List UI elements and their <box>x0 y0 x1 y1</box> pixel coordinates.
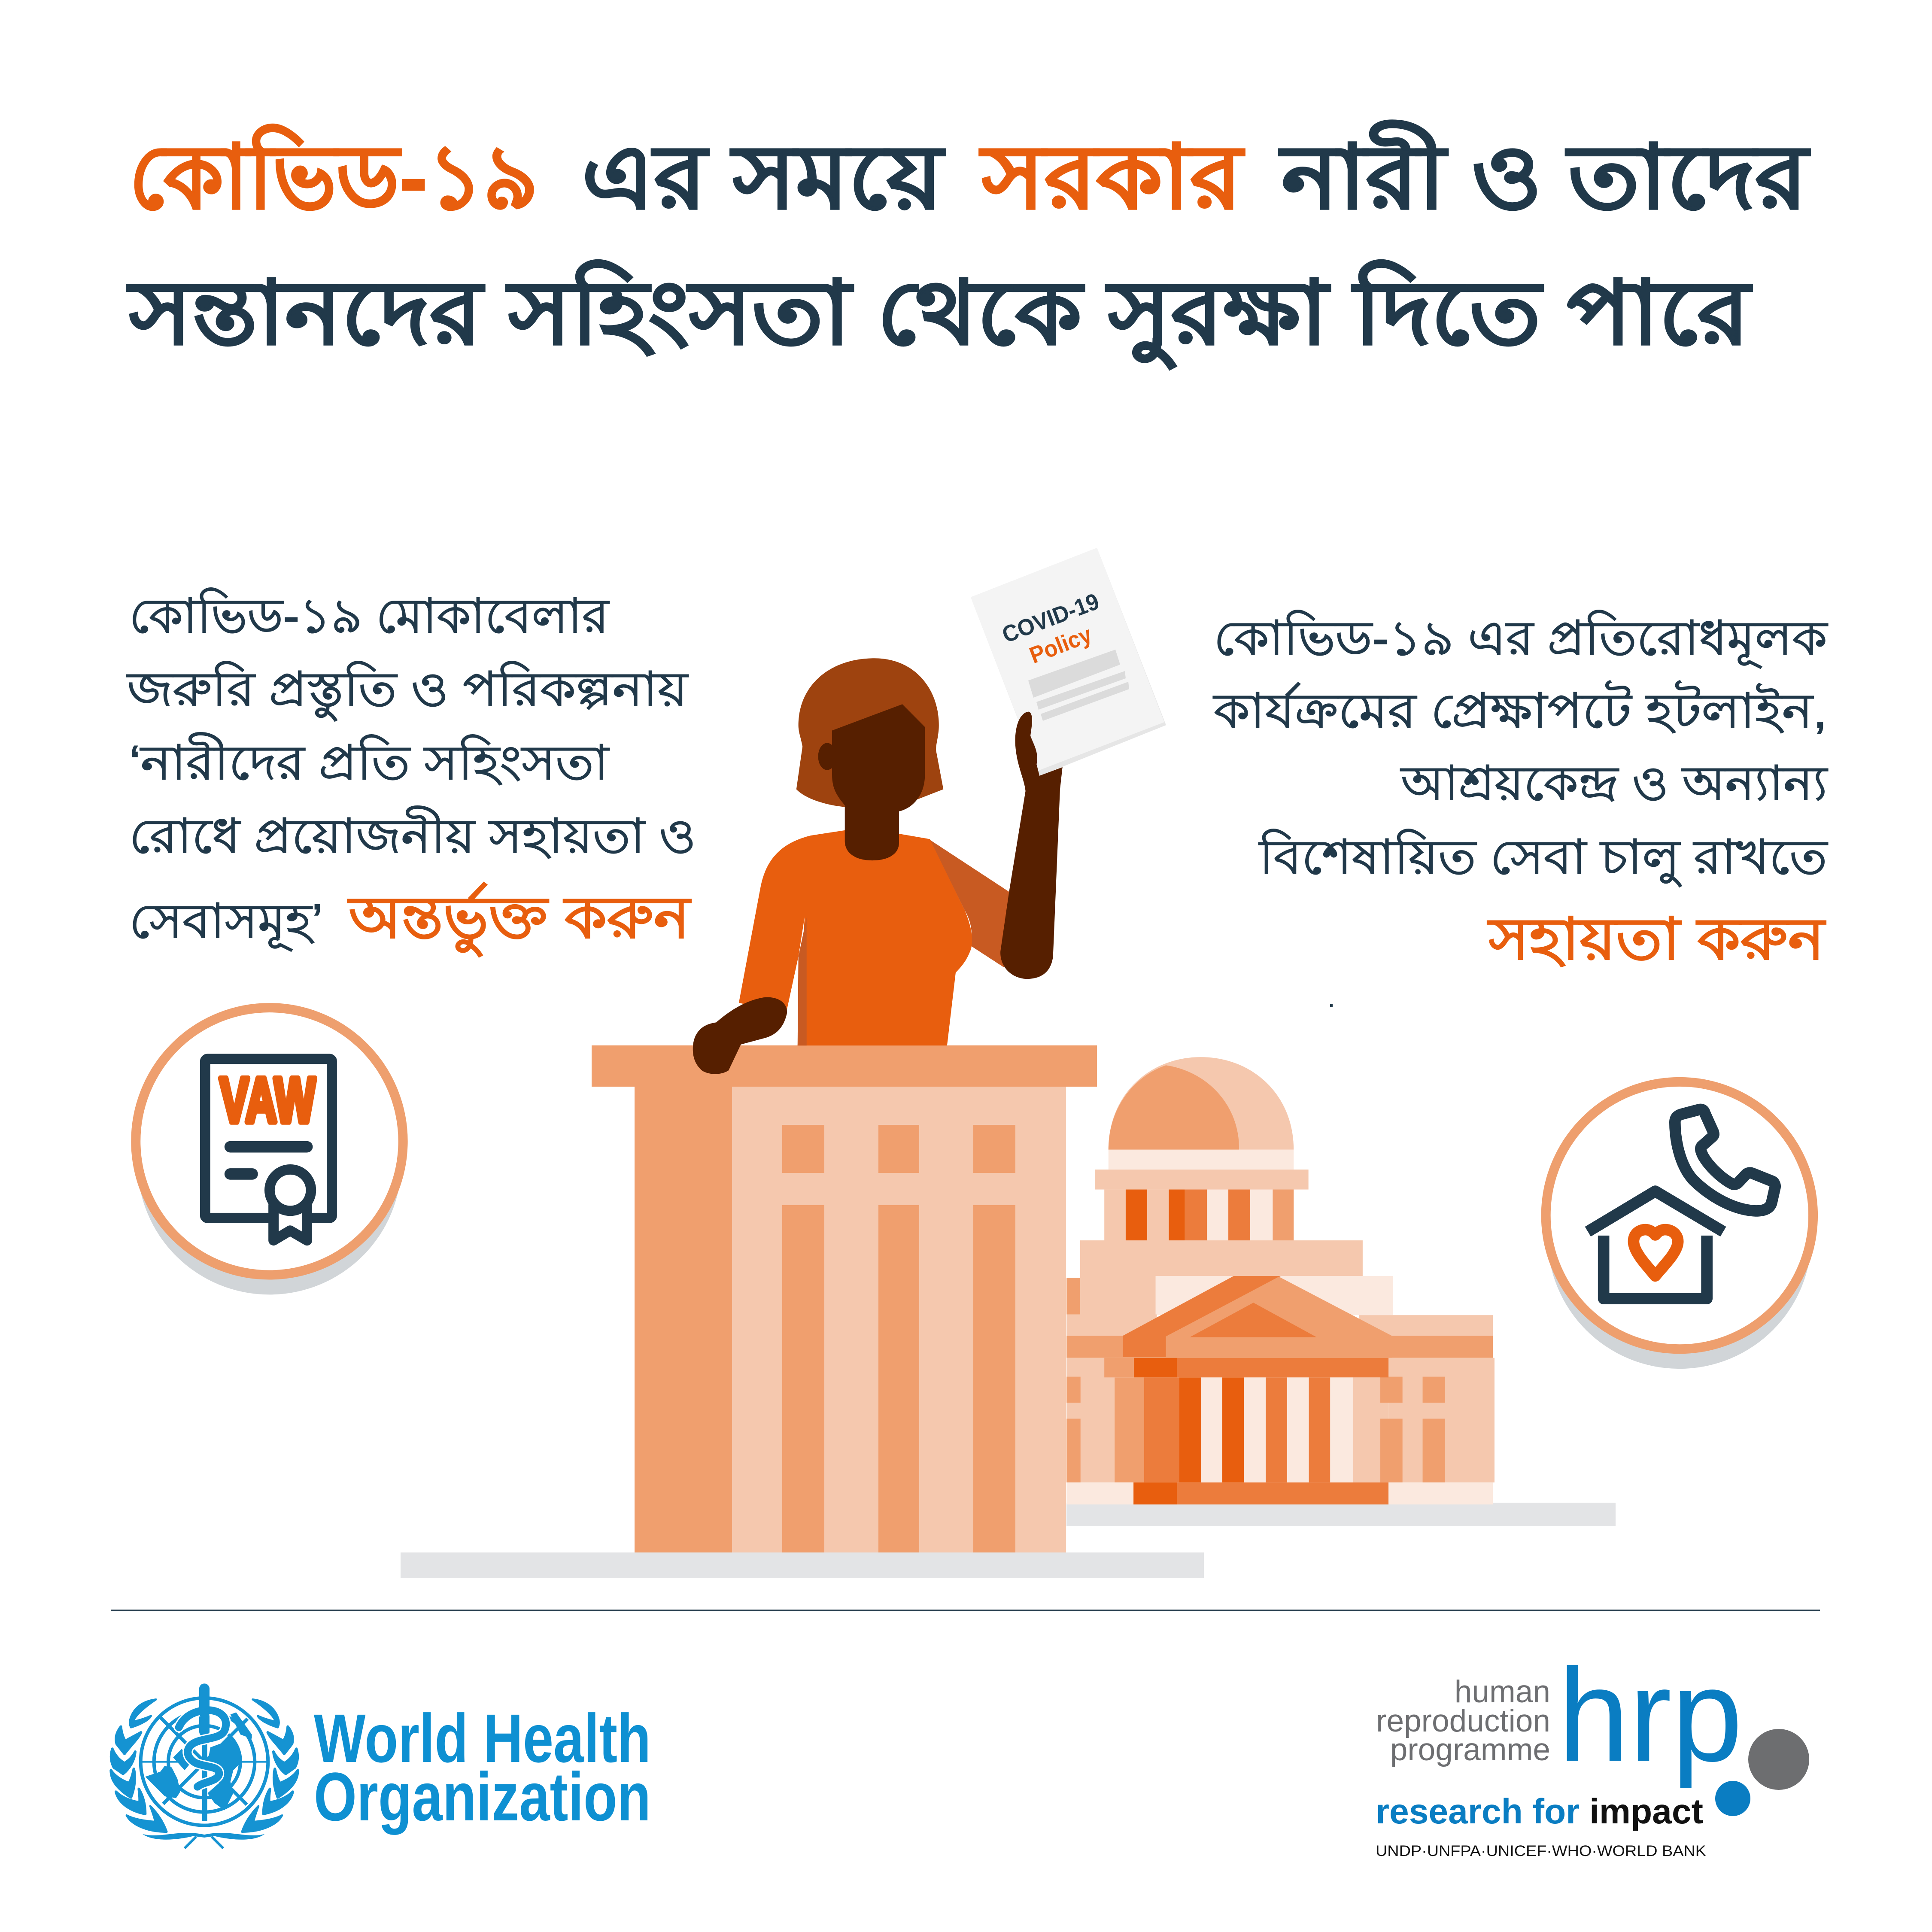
left text block: রোধে প্রয়োজনীয় সহায়তা ও <box>129 806 696 863</box>
icon: VAW certificate badge: VAW <box>220 1065 316 1136</box>
policy document <box>971 548 1166 776</box>
woman figure <box>693 658 1063 1074</box>
WHO emblem <box>111 1689 298 1848</box>
HRP logo: hrp <box>1558 1641 1743 1789</box>
policy document: Policy <box>1026 621 1095 668</box>
WHO logo: World Health <box>314 1700 651 1777</box>
left text block: কোভিড-১৯ মোকাবেলার <box>129 588 610 643</box>
title: সন্তানদের সহিংসতা থেকে সুরক্ষা দিতে পারে <box>127 260 1753 370</box>
HRP logo: UNDP·UNFPA·UNICEF·WHO·WORLD BANK <box>1376 1843 1706 1859</box>
left text block: সেবাসমূহ’ <box>129 894 323 951</box>
title: নারী ও তাদের <box>1279 120 1810 227</box>
left text block <box>126 588 696 958</box>
stray mark <box>1330 1004 1333 1007</box>
title: সরকার <box>979 128 1245 227</box>
left text block: জরুরি প্রস্তুতি ও পরিকল্পনায় <box>126 661 689 721</box>
WHO logo: Organization <box>314 1758 651 1835</box>
right text block: কার্যক্রমের প্রেক্ষাপটে হটলাইন, <box>1213 680 1827 738</box>
podium <box>592 1045 1097 1552</box>
right text block: বিশেষায়িত সেবা চালু রাখতে <box>1258 829 1828 887</box>
right text block: কোভিড-১৯ এর প্রতিরোধমূলক <box>1214 610 1828 668</box>
divider <box>111 1610 1820 1611</box>
right text block: সহায়তা করুন <box>1487 906 1827 972</box>
WHO logo <box>111 1689 651 1848</box>
right text block: আশ্রয়কেন্দ্র ও অন্যান্য <box>1400 756 1828 810</box>
HRP logo <box>1376 1641 1809 1859</box>
HRP logo: programme <box>1390 1732 1550 1767</box>
HRP logo: research for impact <box>1376 1792 1703 1831</box>
title <box>127 120 1810 370</box>
ground shadow: podium <box>401 1552 1204 1578</box>
policy document: COVID-19 <box>999 588 1103 648</box>
icon: VAW certificate badge <box>136 1008 403 1294</box>
right text block <box>1213 610 1828 972</box>
icon: helpline and shelter badge <box>1546 1082 1813 1369</box>
HRP logo: human <box>1455 1674 1550 1709</box>
ground shadow: capitol <box>1066 1503 1616 1526</box>
title: এর সময়ে <box>582 128 946 227</box>
left text block: ‘নারীদের প্রতি সহিংসতা <box>129 732 610 790</box>
left text block: অন্তর্ভুক্ত করুন <box>347 881 692 958</box>
capitol building <box>1066 1057 1495 1504</box>
HRP logo: reproduction <box>1376 1704 1550 1738</box>
title: কোভিড-১৯ <box>129 124 538 227</box>
